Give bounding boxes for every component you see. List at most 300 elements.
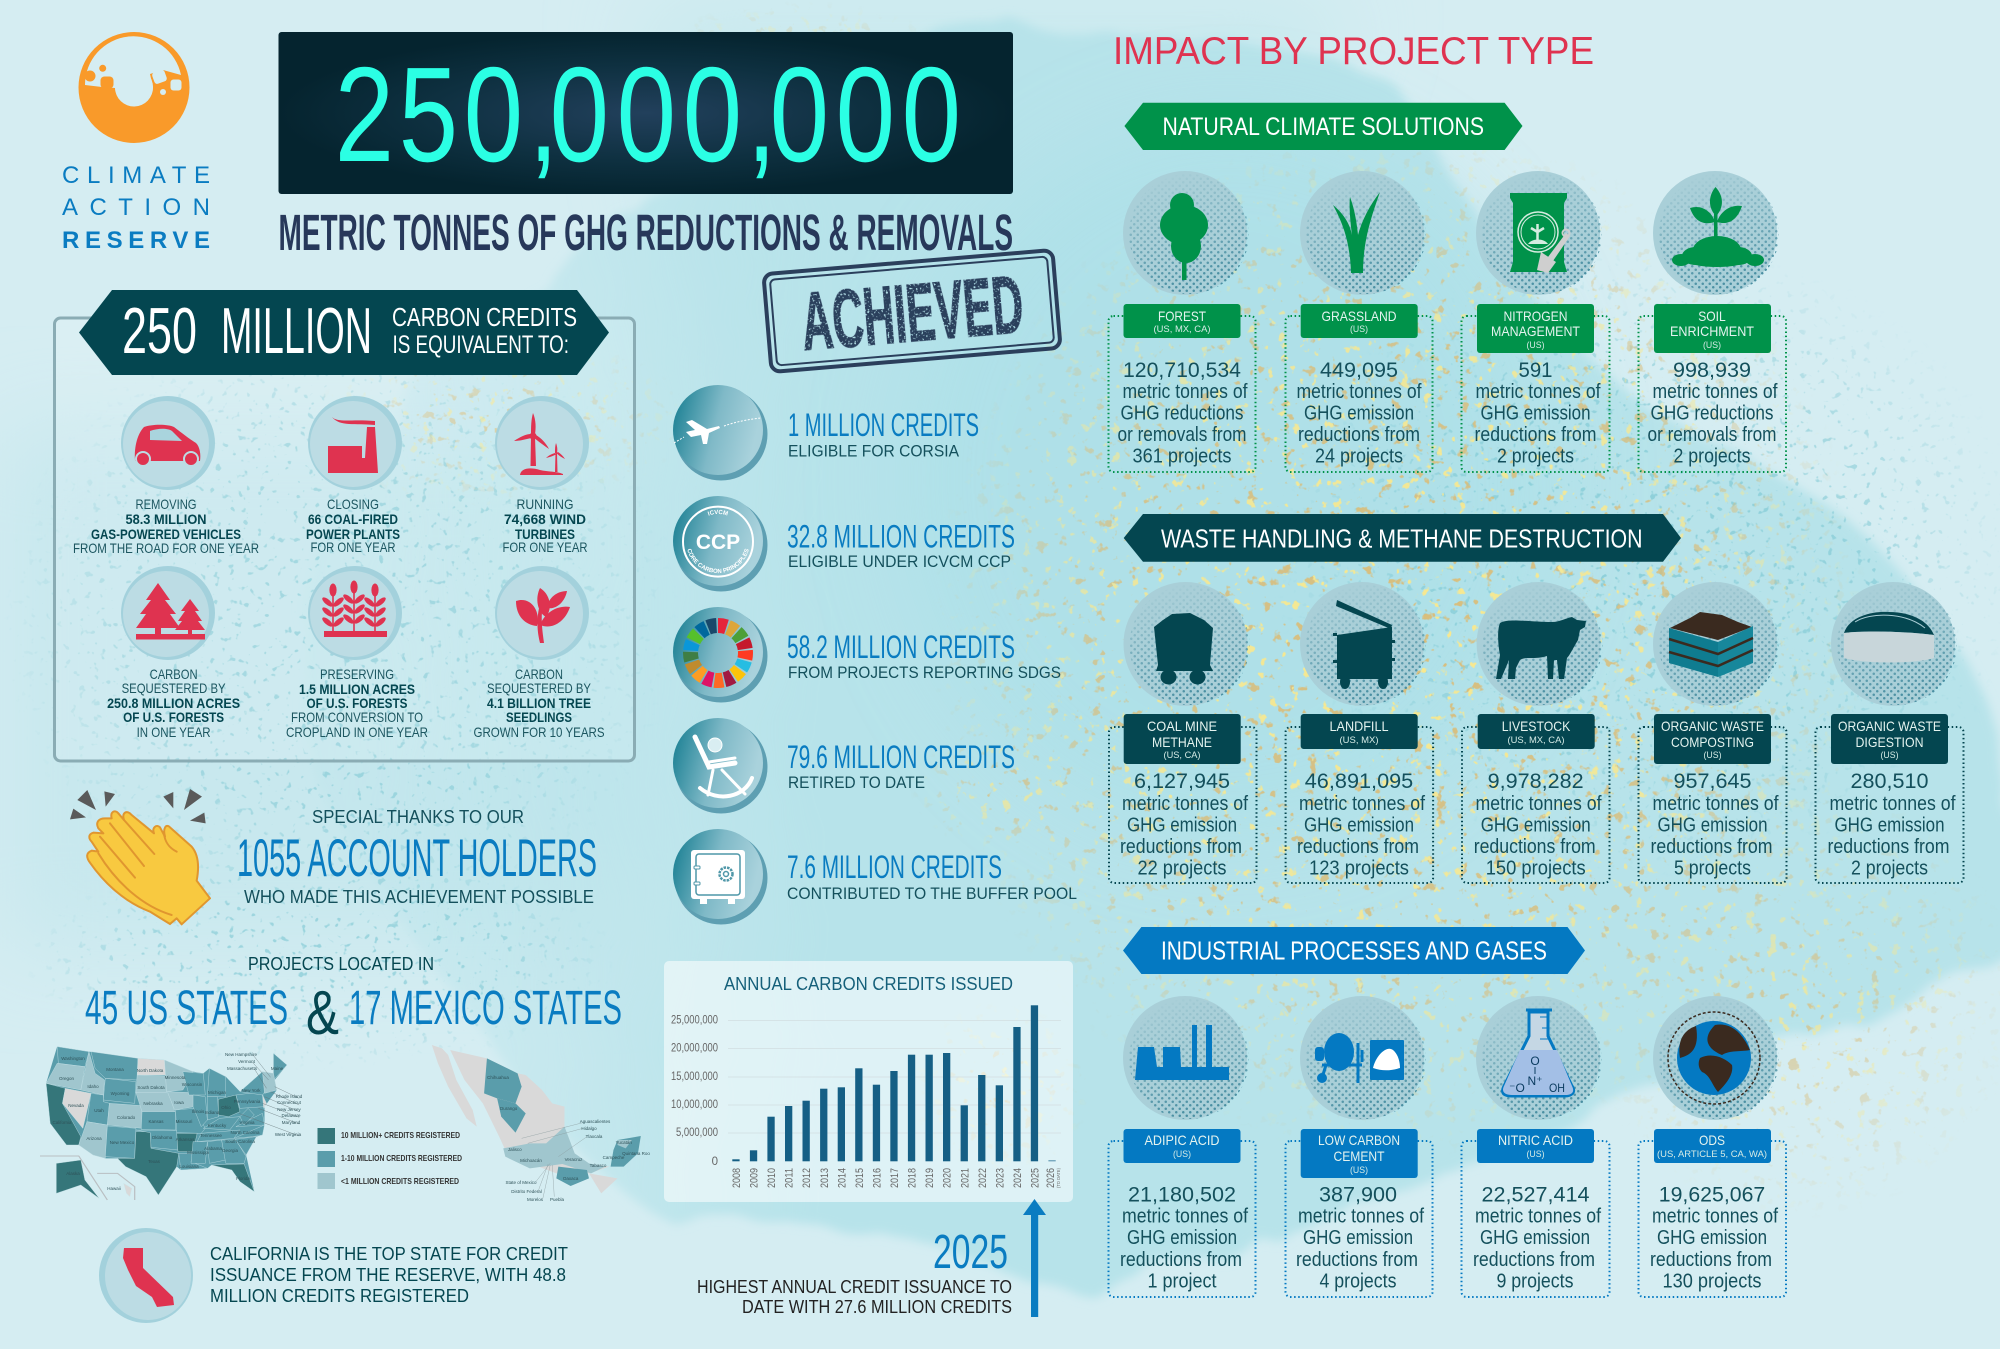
x axis: 2011 xyxy=(784,1168,796,1188)
map: United States: Texas xyxy=(148,1159,161,1164)
item: preserved forests xyxy=(286,566,428,740)
x axis: 2010 xyxy=(766,1168,778,1188)
x axis: 2009 xyxy=(749,1168,761,1188)
icon: CCP seal xyxy=(673,496,768,592)
panel: equivalencies xyxy=(54,290,634,761)
text: preserved forests: CROPLAND IN ONE YEAR xyxy=(286,724,428,740)
x axis: 2022 xyxy=(977,1168,989,1188)
map: United States: South Dakota xyxy=(137,1085,165,1090)
map: United States: California xyxy=(52,1120,72,1125)
text: buffer pool xyxy=(787,849,1077,903)
x axis xyxy=(731,1168,1061,1188)
map: United States: Alaska xyxy=(66,1171,80,1176)
stat: coal mine methane: reductions from xyxy=(1120,836,1242,858)
map: United States: Kentucky xyxy=(208,1123,227,1128)
stat: coal mine methane: 22 projects xyxy=(1138,858,1226,880)
label: adipic acid: ADIPIC ACID xyxy=(1144,1132,1220,1148)
stat: ODS: 130 projects xyxy=(1662,1270,1762,1292)
icon: flask xyxy=(1476,996,1602,1120)
icon: grass xyxy=(1300,171,1426,295)
item: vehicles xyxy=(73,396,259,556)
card: soil enrichment xyxy=(1638,171,1786,472)
card: adipic acid xyxy=(1108,996,1256,1297)
label: low carbon cement: (US) xyxy=(1350,1165,1368,1176)
box: forest xyxy=(1108,316,1256,472)
icon: rocking chair xyxy=(673,718,768,814)
label: organic waste composting: COMPOSTING xyxy=(1671,734,1754,750)
stat: grassland xyxy=(1296,359,1422,468)
box: soil enrichment xyxy=(1638,316,1786,472)
x axis: 2020 xyxy=(942,1168,954,1188)
stat: low carbon cement: 4 projects xyxy=(1320,1270,1396,1292)
stat: forest: GHG reductions xyxy=(1120,402,1244,424)
box: organic waste composting xyxy=(1638,727,1786,883)
map: United States: Wyoming xyxy=(111,1091,130,1096)
map: Mexico: Campeche xyxy=(603,1155,625,1160)
stat: forest: 120,710,534 xyxy=(1123,359,1241,382)
text: California: ISSUANCE FROM THE RESERVE, WITH 48.8 xyxy=(210,1265,566,1285)
stat: nitrogen management: metric tonnes of xyxy=(1476,381,1601,403)
map: United States: North Carolina xyxy=(230,1130,260,1135)
callout: 2025 highest annual issuance: DATE WITH 27.6 MILLION CREDITS xyxy=(742,1297,1012,1317)
stat: livestock: metric tonnes of xyxy=(1476,793,1602,815)
panel: project locations xyxy=(40,954,650,1323)
text: wind turbines: 74,668 WIND xyxy=(504,511,586,527)
stat: nitric acid: metric tonnes of xyxy=(1475,1206,1601,1228)
x axis: 2019 xyxy=(924,1168,936,1188)
heading: impact by project type: IMPACT BY PROJECT TYPE xyxy=(1113,30,1594,73)
text: buffer pool: 7.6 MILLION CREDITS xyxy=(787,849,1002,885)
panel: waste handling and methane destruction xyxy=(1109,514,1964,883)
stat: forest: 361 projects xyxy=(1132,446,1232,468)
map: United States: Nevada xyxy=(68,1103,84,1108)
icon: fertilizer bag xyxy=(1476,171,1602,295)
card: coal mine methane xyxy=(1109,582,1256,883)
map: United States: New York xyxy=(241,1088,261,1093)
map: Mexico: Distrito Federal xyxy=(511,1189,542,1194)
text: CORSIA xyxy=(788,407,979,460)
stat: adipic acid: 1 project xyxy=(1148,1270,1217,1292)
map: United States: Connecticut xyxy=(277,1100,302,1105)
banner: 250 million carbon credits: CARBON CREDITS xyxy=(392,302,577,332)
bars xyxy=(732,1005,1056,1161)
label: coal mine methane: (US, CA) xyxy=(1164,750,1200,761)
stamp: achieved: ACHIEVED xyxy=(798,259,1027,368)
callout: California top state xyxy=(99,1228,568,1323)
box: grassland xyxy=(1286,316,1432,472)
y axis: 0 xyxy=(712,1156,718,1168)
icon: digester tank xyxy=(1831,582,1957,706)
x axis: 2026 xyxy=(1045,1168,1057,1188)
text: wind turbines xyxy=(502,496,588,555)
map: Mexico: Durango xyxy=(500,1106,518,1111)
x axis: 2018 xyxy=(907,1168,919,1188)
banner: industrial processes: INDUSTRIAL PROCESSES AND GASES xyxy=(1161,936,1547,966)
text: special thanks to our: SPECIAL THANKS TO OUR xyxy=(312,807,524,827)
stat: ODS xyxy=(1650,1184,1778,1292)
stat: nitric acid: 9 projects xyxy=(1496,1270,1574,1292)
card: nitric acid xyxy=(1462,996,1610,1297)
text: tree seedlings: CARBON xyxy=(515,666,563,682)
x axis: 2013 xyxy=(819,1168,831,1188)
label: low carbon cement xyxy=(1301,1129,1418,1178)
item: tree seedlings xyxy=(474,566,604,740)
label: low carbon cement: LOW CARBON xyxy=(1318,1132,1400,1148)
stat: ODS: 19,625,067 xyxy=(1659,1184,1765,1207)
map: Mexico xyxy=(432,1045,650,1202)
stat: livestock: 150 projects xyxy=(1486,858,1586,880)
text: tree seedlings: SEEDLINGS xyxy=(506,709,572,725)
headline: metric tonnes: METRIC TONNES OF GHG REDUCTIONS & REMOVALS xyxy=(278,204,1013,261)
stat: organic waste composting: 957,645 xyxy=(1674,770,1752,793)
icon: CCP seal: ICVCM xyxy=(708,510,728,516)
label: coal mine methane: COAL MINE xyxy=(1147,718,1217,734)
heading: states xyxy=(85,979,622,1048)
map: United States: Missouri xyxy=(176,1119,192,1124)
map: United States: Rhode Island xyxy=(276,1094,303,1099)
text: preserved forests: 1.5 MILLION ACRES xyxy=(299,681,415,697)
text: power plants: CLOSING xyxy=(327,496,379,512)
map: Mexico: Michoacán xyxy=(520,1158,542,1163)
text: CORSIA: 1 MILLION CREDITS xyxy=(788,407,979,443)
label: landfill: (US, MX) xyxy=(1340,735,1378,746)
stat: livestock: GHG emission xyxy=(1481,814,1591,836)
stat: landfill: 46,891,095 xyxy=(1305,770,1413,793)
card: forest xyxy=(1108,171,1256,472)
card: grassland xyxy=(1286,171,1432,472)
map: United States: Washington xyxy=(61,1056,85,1061)
stat: adipic acid: GHG emission xyxy=(1127,1227,1237,1249)
banner: industrial processes xyxy=(1123,927,1585,974)
text: tree seedlings: 4.1 BILLION TREE xyxy=(487,695,591,711)
map: United States: Wisconsin xyxy=(182,1082,203,1087)
icon: sprout on soil xyxy=(1653,171,1779,295)
text: acres of forests: OF U.S. FORESTS xyxy=(123,709,224,725)
map: Mexico: Oaxaca xyxy=(563,1176,579,1181)
icon: globe xyxy=(1653,996,1779,1120)
label: nitric acid xyxy=(1477,1129,1594,1163)
text: California: CALIFORNIA IS THE TOP STATE FOR CREDIT xyxy=(210,1244,568,1264)
label: organic waste composting xyxy=(1654,714,1771,764)
logo wordmark xyxy=(62,162,210,254)
stat: organic waste digestion: GHG emission xyxy=(1834,814,1944,836)
x axis: 2008 xyxy=(731,1168,743,1188)
map: Mexico: Hidalgo xyxy=(581,1126,597,1131)
label: nitrogen management: NITROGEN xyxy=(1504,308,1568,324)
map: United States: South Carolina xyxy=(225,1139,255,1144)
card: low carbon cement xyxy=(1286,996,1432,1297)
stat: organic waste composting xyxy=(1650,770,1779,880)
map: United States: Utah xyxy=(94,1108,104,1113)
label: soil enrichment xyxy=(1654,304,1771,353)
label: organic waste digestion: (US) xyxy=(1880,750,1898,761)
x axis: 2025 xyxy=(1030,1168,1042,1188)
item: wind turbines xyxy=(495,396,589,555)
y axis: 10,000,000 xyxy=(671,1099,718,1111)
map legend: 10 MILLION+ CREDITS REGISTERED xyxy=(341,1130,460,1140)
text: California: MILLION CREDITS REGISTERED xyxy=(210,1286,469,1306)
stat: nitrogen management: GHG emission xyxy=(1480,402,1590,424)
banner: 250 million carbon credits xyxy=(79,290,609,375)
label: soil enrichment: ENRICHMENT xyxy=(1670,323,1754,339)
stat: forest: metric tonnes of xyxy=(1122,381,1248,403)
text: preserved forests: OF U.S. FORESTS xyxy=(306,695,408,711)
stat: nitric acid xyxy=(1473,1184,1601,1292)
icon: pine trees xyxy=(121,566,215,660)
text: tree seedlings: SEQUESTERED BY xyxy=(487,680,592,696)
x axis: 2016 xyxy=(872,1168,884,1188)
stat: soil enrichment: GHG reductions xyxy=(1650,402,1774,424)
icon: CCP seal: CORE CARBON PRINCIPLES xyxy=(688,548,748,574)
map: Mexico: Chihuahua xyxy=(487,1075,509,1080)
label: forest: FOREST xyxy=(1158,308,1206,324)
icon: SDG wheel xyxy=(673,607,768,702)
text: retired xyxy=(787,739,1015,792)
text: vehicles: REMOVING xyxy=(136,496,196,512)
text: vehicles: FROM THE ROAD FOR ONE YEAR xyxy=(73,540,259,556)
panel: special thanks xyxy=(70,789,597,924)
stat: soil enrichment: 2 projects xyxy=(1674,446,1750,468)
label: nitrogen management xyxy=(1477,304,1594,353)
y axis xyxy=(671,1014,1061,1168)
card: livestock xyxy=(1462,582,1610,883)
stat: adipic acid: reductions from xyxy=(1120,1249,1242,1271)
x axis: 2024 xyxy=(1012,1168,1024,1188)
card: nitrogen management xyxy=(1462,171,1610,472)
text: vehicles: 58.3 MILLION xyxy=(126,511,206,527)
logo: Climate Action Reserve xyxy=(62,32,210,254)
map: Mexico: Yucatán xyxy=(616,1140,632,1145)
item: power plants xyxy=(306,396,402,555)
callout: 2025 highest annual issuance: 2025 xyxy=(933,1226,1008,1279)
logo wordmark: ACTION xyxy=(62,194,210,221)
text: California xyxy=(210,1244,568,1306)
stat: nitric acid: 22,527,414 xyxy=(1482,1184,1590,1207)
label: coal mine methane: METHANE xyxy=(1152,734,1212,750)
text: power plants: POWER PLANTS xyxy=(306,526,400,542)
icon: cow xyxy=(1477,582,1603,706)
label: adipic acid xyxy=(1124,1129,1240,1163)
map: United States: Hawaii xyxy=(107,1186,121,1191)
y axis: 15,000,000 xyxy=(671,1071,718,1083)
icon: factory xyxy=(308,396,402,490)
icon: crops xyxy=(308,566,402,660)
card: landfill xyxy=(1286,582,1433,883)
text: preserved forests: FROM CONVERSION TO xyxy=(291,709,423,725)
heading: states: 45 US STATES xyxy=(85,982,288,1035)
label: nitrogen management: MANAGEMENT xyxy=(1491,323,1580,339)
text: acres of forests: CARBON xyxy=(150,666,198,682)
stat: forest: or removals from xyxy=(1118,424,1246,446)
label: forest xyxy=(1124,304,1240,338)
stat: adipic acid: metric tonnes of xyxy=(1122,1206,1248,1228)
x axis: 2017 xyxy=(889,1168,901,1188)
map: United States: Oregon xyxy=(59,1076,74,1081)
stat: grassland: metric tonnes of xyxy=(1296,381,1422,403)
box: coal mine methane xyxy=(1109,727,1256,883)
label: organic waste digestion xyxy=(1831,714,1948,764)
label: adipic acid: (US) xyxy=(1173,1149,1191,1160)
stat: organic waste digestion: reductions from xyxy=(1828,836,1950,858)
callout: 2025 highest annual issuance xyxy=(697,1226,1012,1317)
map: United States: Vermont xyxy=(238,1059,256,1064)
map: Mexico: Jalisco xyxy=(508,1147,522,1152)
callout: 2025 highest annual issuance: HIGHEST ANNUAL CREDIT ISSUANCE TO xyxy=(697,1277,1012,1297)
icon: factory skyline xyxy=(1123,996,1249,1120)
stat: landfill: 123 projects xyxy=(1309,858,1409,880)
label: grassland: GRASSLAND xyxy=(1322,308,1396,324)
map: United States: Maryland xyxy=(282,1120,301,1125)
text: power plants xyxy=(306,496,400,555)
card: organic waste digestion xyxy=(1816,582,1964,883)
x axis: 2021 xyxy=(959,1168,971,1188)
map legend: <1 MILLION CREDITS REGISTERED xyxy=(341,1176,459,1186)
label: organic waste digestion: ORGANIC WASTE xyxy=(1838,718,1941,734)
stat: forest xyxy=(1118,359,1248,468)
stat: landfill: metric tonnes of xyxy=(1299,793,1425,815)
map: United States: Nebraska xyxy=(143,1101,163,1106)
map: Mexico: State of Mexico xyxy=(505,1180,537,1185)
stat: soil enrichment: metric tonnes of xyxy=(1652,381,1778,403)
banner: natural climate solutions xyxy=(1124,103,1522,150)
map: United States: Oklahoma xyxy=(152,1135,173,1140)
text: SDGs xyxy=(787,629,1061,682)
map: United States: Maine xyxy=(271,1066,284,1071)
stat: organic waste composting: GHG emission xyxy=(1658,814,1768,836)
text: SDGs: 58.2 MILLION CREDITS xyxy=(787,629,1015,665)
icon: orange logo circle xyxy=(78,32,190,143)
label: coal mine methane xyxy=(1124,714,1241,764)
icon: tree xyxy=(1123,171,1249,295)
text: tree seedlings xyxy=(474,666,604,740)
map: United States: North Dakota xyxy=(137,1068,164,1073)
label: nitric acid: NITRIC ACID xyxy=(1498,1132,1573,1148)
item: ICVCM CCP xyxy=(673,496,1015,592)
stat: soil enrichment: 998,939 xyxy=(1673,359,1751,382)
icon: CCP seal: CCP xyxy=(696,531,740,554)
label: forest: (US, MX, CA) xyxy=(1154,324,1210,335)
icon: flask: OH xyxy=(1549,1081,1565,1095)
stat: ODS: reductions from xyxy=(1650,1249,1772,1271)
label: soil enrichment: (US) xyxy=(1703,340,1721,351)
map: United States: Georgia xyxy=(222,1148,238,1153)
panel: natural climate solutions xyxy=(1108,103,1786,472)
label: nitric acid: (US) xyxy=(1526,1149,1544,1160)
stat: ODS: GHG emission xyxy=(1657,1227,1767,1249)
x axis: 2012 xyxy=(801,1168,813,1188)
y axis: 5,000,000 xyxy=(676,1127,718,1139)
stat: nitrogen management: 591 xyxy=(1518,359,1552,382)
y axis: 25,000,000 xyxy=(671,1014,718,1026)
map: Mexico: Veracruz xyxy=(565,1157,583,1162)
text: wind turbines: FOR ONE YEAR xyxy=(502,539,588,555)
map: United States: Iowa xyxy=(174,1100,184,1105)
map: United States: Indiana xyxy=(205,1110,220,1115)
stat: coal mine methane xyxy=(1120,770,1248,880)
item: retired xyxy=(673,718,1015,814)
label: ODS: ODS xyxy=(1699,1132,1725,1148)
text: projects located in: PROJECTS LOCATED IN xyxy=(248,954,434,974)
map: Mexico: Tabasco xyxy=(590,1163,607,1168)
stat: grassland: 24 projects xyxy=(1315,446,1403,468)
icon: seedling xyxy=(495,566,589,660)
stat: adipic acid: 21,180,502 xyxy=(1128,1184,1236,1207)
x axis: 2014 xyxy=(836,1168,848,1188)
map: United States: Minnesota xyxy=(165,1075,186,1080)
banner: natural climate solutions: NATURAL CLIMATE SOLUTIONS xyxy=(1162,113,1484,141)
stat: livestock: reductions from xyxy=(1474,836,1596,858)
text: buffer pool: CONTRIBUTED TO THE BUFFER POOL xyxy=(787,885,1077,903)
stat: soil enrichment xyxy=(1648,359,1778,468)
map: United States: Arkansas xyxy=(176,1137,195,1142)
stat: low carbon cement: 387,900 xyxy=(1319,1184,1397,1207)
stat: landfill: GHG emission xyxy=(1304,814,1414,836)
stat: nitrogen management xyxy=(1474,359,1601,468)
label: grassland: (US) xyxy=(1350,324,1368,335)
map: United States: Arizona xyxy=(86,1136,102,1141)
banner: 250 million carbon credits: MILLION xyxy=(221,294,372,367)
x axis: (TO DATE) xyxy=(1056,1168,1061,1188)
chart background xyxy=(664,961,1073,1202)
icon: California xyxy=(99,1228,193,1323)
text: wind turbines: TURBINES xyxy=(515,526,575,542)
icon: flask: N⁺ xyxy=(1528,1074,1542,1088)
label: grassland xyxy=(1301,304,1418,338)
icon: car xyxy=(121,396,215,490)
y axis: 20,000,000 xyxy=(671,1042,718,1054)
label: organic waste composting: ORGANIC WASTE xyxy=(1661,718,1764,734)
map: United States: West Virginia xyxy=(275,1132,302,1137)
label: ODS xyxy=(1654,1129,1771,1163)
label: livestock xyxy=(1478,714,1595,749)
label: landfill xyxy=(1301,714,1418,749)
map: United States: Michigan xyxy=(208,1090,226,1095)
stat: grassland: 449,095 xyxy=(1320,359,1398,382)
stat: organic waste digestion: metric tonnes of xyxy=(1830,793,1956,815)
label: nitrogen management: (US) xyxy=(1526,340,1544,351)
box: adipic acid xyxy=(1108,1141,1256,1297)
map: United States: Mississippi xyxy=(187,1150,209,1155)
map: Mexico: Morelos xyxy=(527,1197,544,1202)
stat: soil enrichment: or removals from xyxy=(1648,424,1776,446)
text: ICVCM CCP: ELIGIBLE UNDER ICVCM CCP xyxy=(788,553,1011,571)
text: acres of forests: SEQUESTERED BY xyxy=(122,680,226,696)
map: Mexico: Tlaxcala xyxy=(586,1134,603,1139)
icon: wind turbines xyxy=(495,396,589,490)
map: United States: Louisiana xyxy=(179,1164,199,1169)
item: CORSIA xyxy=(673,385,979,480)
stat: coal mine methane: metric tonnes of xyxy=(1122,793,1248,815)
map: United States: Florida xyxy=(236,1176,250,1181)
stat: nitric acid: GHG emission xyxy=(1480,1227,1590,1249)
stat: grassland: GHG emission xyxy=(1304,402,1414,424)
label: organic waste composting: (US) xyxy=(1704,750,1722,761)
map: United States: Virginia xyxy=(240,1120,255,1125)
text: wind turbines: RUNNING xyxy=(516,496,574,512)
card: organic waste composting xyxy=(1638,582,1786,883)
stat: nitrogen management: 2 projects xyxy=(1497,446,1574,468)
text: tree seedlings: GROWN FOR 10 YEARS xyxy=(474,724,604,740)
x axis: 2015 xyxy=(854,1168,866,1188)
label: ODS: (US, ARTICLE 5, CA, WA) xyxy=(1657,1149,1767,1160)
stat: organic waste composting: metric tonnes of xyxy=(1652,793,1779,815)
map legend: 1-10 MILLION CREDITS REGISTERED xyxy=(341,1153,462,1163)
map: United States: New Jersey xyxy=(277,1107,301,1112)
label: organic waste digestion: DIGESTION xyxy=(1856,734,1924,750)
map: United States: Idaho xyxy=(87,1084,99,1089)
text: SDGs: FROM PROJECTS REPORTING SDGS xyxy=(788,664,1061,682)
map: Mexico: Puebla xyxy=(550,1197,565,1202)
